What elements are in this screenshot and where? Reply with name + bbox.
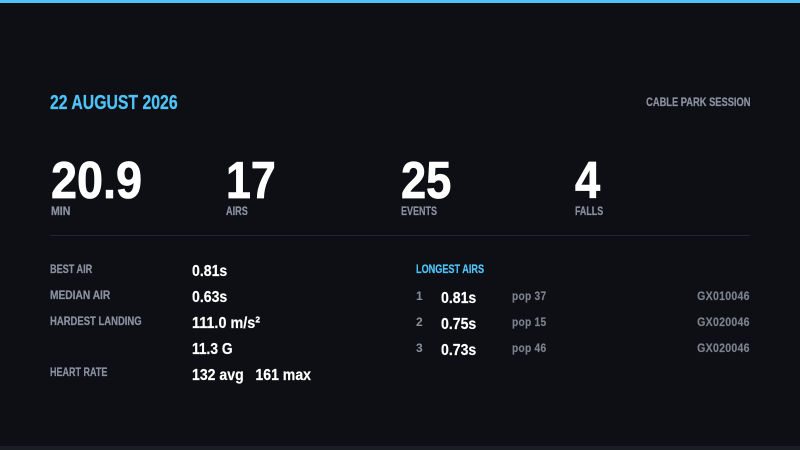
row: longest air 1: pop 37 [512,289,546,303]
row: longest air 1: 1 [416,289,423,303]
date heading: 22 AUGUST 2026 [50,92,178,114]
value: best air: 0.81s [192,263,227,280]
value: heart rate: 132 avg 161 max [192,366,311,384]
row: longest air 2: GX020046 [697,315,750,329]
stat: falls: FALLS [575,204,603,218]
label: hardest landing: HARDEST LANDING [50,314,142,328]
row: longest air 3: 0.73s [441,342,476,358]
stat: events: EVENTS [400,204,437,218]
stat: minutes: MIN [50,204,70,218]
stat: falls: 4 [575,152,600,210]
stat: airs: AIRS [226,204,247,218]
row: longest air 3: 3 [416,341,423,355]
value: hardest landing m/s²: 111.0 m/s² [192,314,260,332]
row: longest air 1 [416,289,750,306]
row: longest air 3: GX020046 [697,341,750,355]
value: hardest landing G: 11.3 G [192,340,233,358]
label: best air: BEST AIR [50,262,92,276]
top accent bar [0,0,800,3]
row: longest air 2 [416,315,750,332]
value: median air: 0.63s [192,289,227,306]
row: longest air 1: GX010046 [697,289,750,303]
row: longest air 2: 2 [416,315,423,329]
stat: events: 25 [400,152,451,210]
bottom bar [0,446,800,450]
label: heart rate: HEART RATE [50,365,107,379]
row: longest air 2: pop 15 [512,315,546,329]
row: longest air 3 [416,341,750,358]
row: longest air 1: 0.81s [441,290,476,306]
row: longest air 2: 0.75s [441,316,476,332]
heading: longest airs: LONGEST AIRS [416,262,484,276]
session title: CABLE PARK SESSION [646,95,750,109]
row: longest air 3: pop 46 [512,341,546,355]
stat: airs: 17 [226,152,275,210]
label: median air: MEDIAN AIR [50,288,110,302]
stat: minutes: 20.9 [50,152,142,210]
